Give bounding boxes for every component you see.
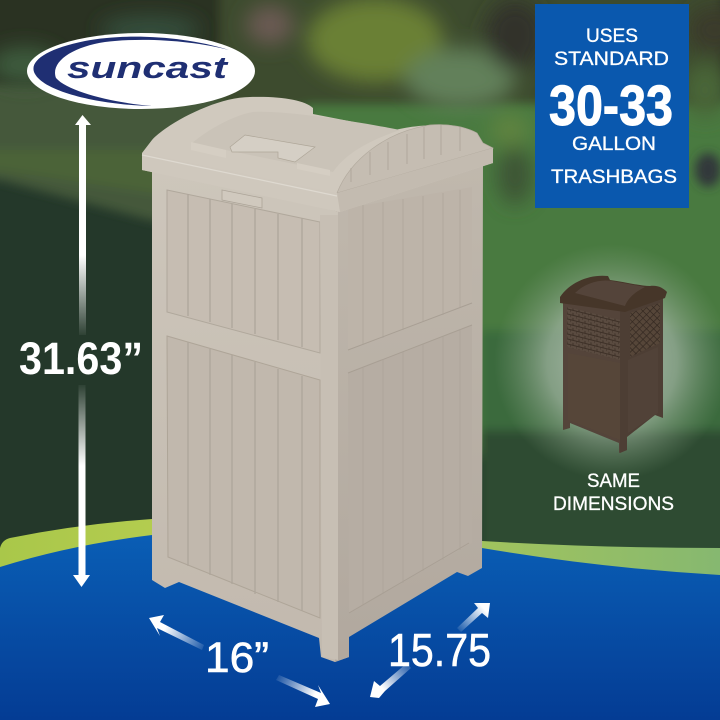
- label: width: 16”: [205, 634, 269, 682]
- callout: bag size panel: USES: [586, 26, 638, 47]
- caption: same dimensions: SAME: [587, 471, 640, 492]
- callout: bag size panel: TRASHBAGS: [551, 167, 677, 188]
- green curved band: [0, 510, 720, 580]
- logo: suncast: [27, 33, 255, 109]
- main product: beige trash bin: [142, 97, 493, 662]
- depth dimension arrows: [370, 603, 490, 698]
- bin front face: [152, 168, 349, 662]
- bin lid: [142, 97, 493, 212]
- caption: same dimensions: [553, 471, 674, 515]
- lid front rim: [142, 153, 340, 212]
- lawn zones: [0, 80, 300, 240]
- logo wordmark: suncast: [67, 50, 229, 85]
- callout: bag size panel: [535, 4, 689, 208]
- blue floor: [0, 529, 720, 720]
- bin right side face: [320, 163, 483, 662]
- glow behind small bin: [494, 244, 720, 480]
- logo swoosh: [33, 37, 229, 106]
- callout: bag size panel: STANDARD: [554, 49, 669, 70]
- label: height: 31.63”: [19, 333, 143, 384]
- width dimension arrows: [149, 615, 330, 707]
- caption: same dimensions: DIMENSIONS: [553, 494, 674, 515]
- callout: bag size panel: 30-33: [549, 74, 673, 138]
- garden bed: [0, 0, 720, 85]
- brown small bin: alternative model: [560, 276, 667, 453]
- lid arch right: [337, 125, 493, 193]
- callout: bag size panel: GALLON: [572, 134, 656, 155]
- lid handle: [230, 135, 315, 162]
- height dimension arrow: [73, 115, 91, 587]
- label: depth: 15.75: [388, 624, 491, 676]
- bin lattice side panel: [630, 303, 660, 357]
- bin woven front panel: [567, 307, 620, 360]
